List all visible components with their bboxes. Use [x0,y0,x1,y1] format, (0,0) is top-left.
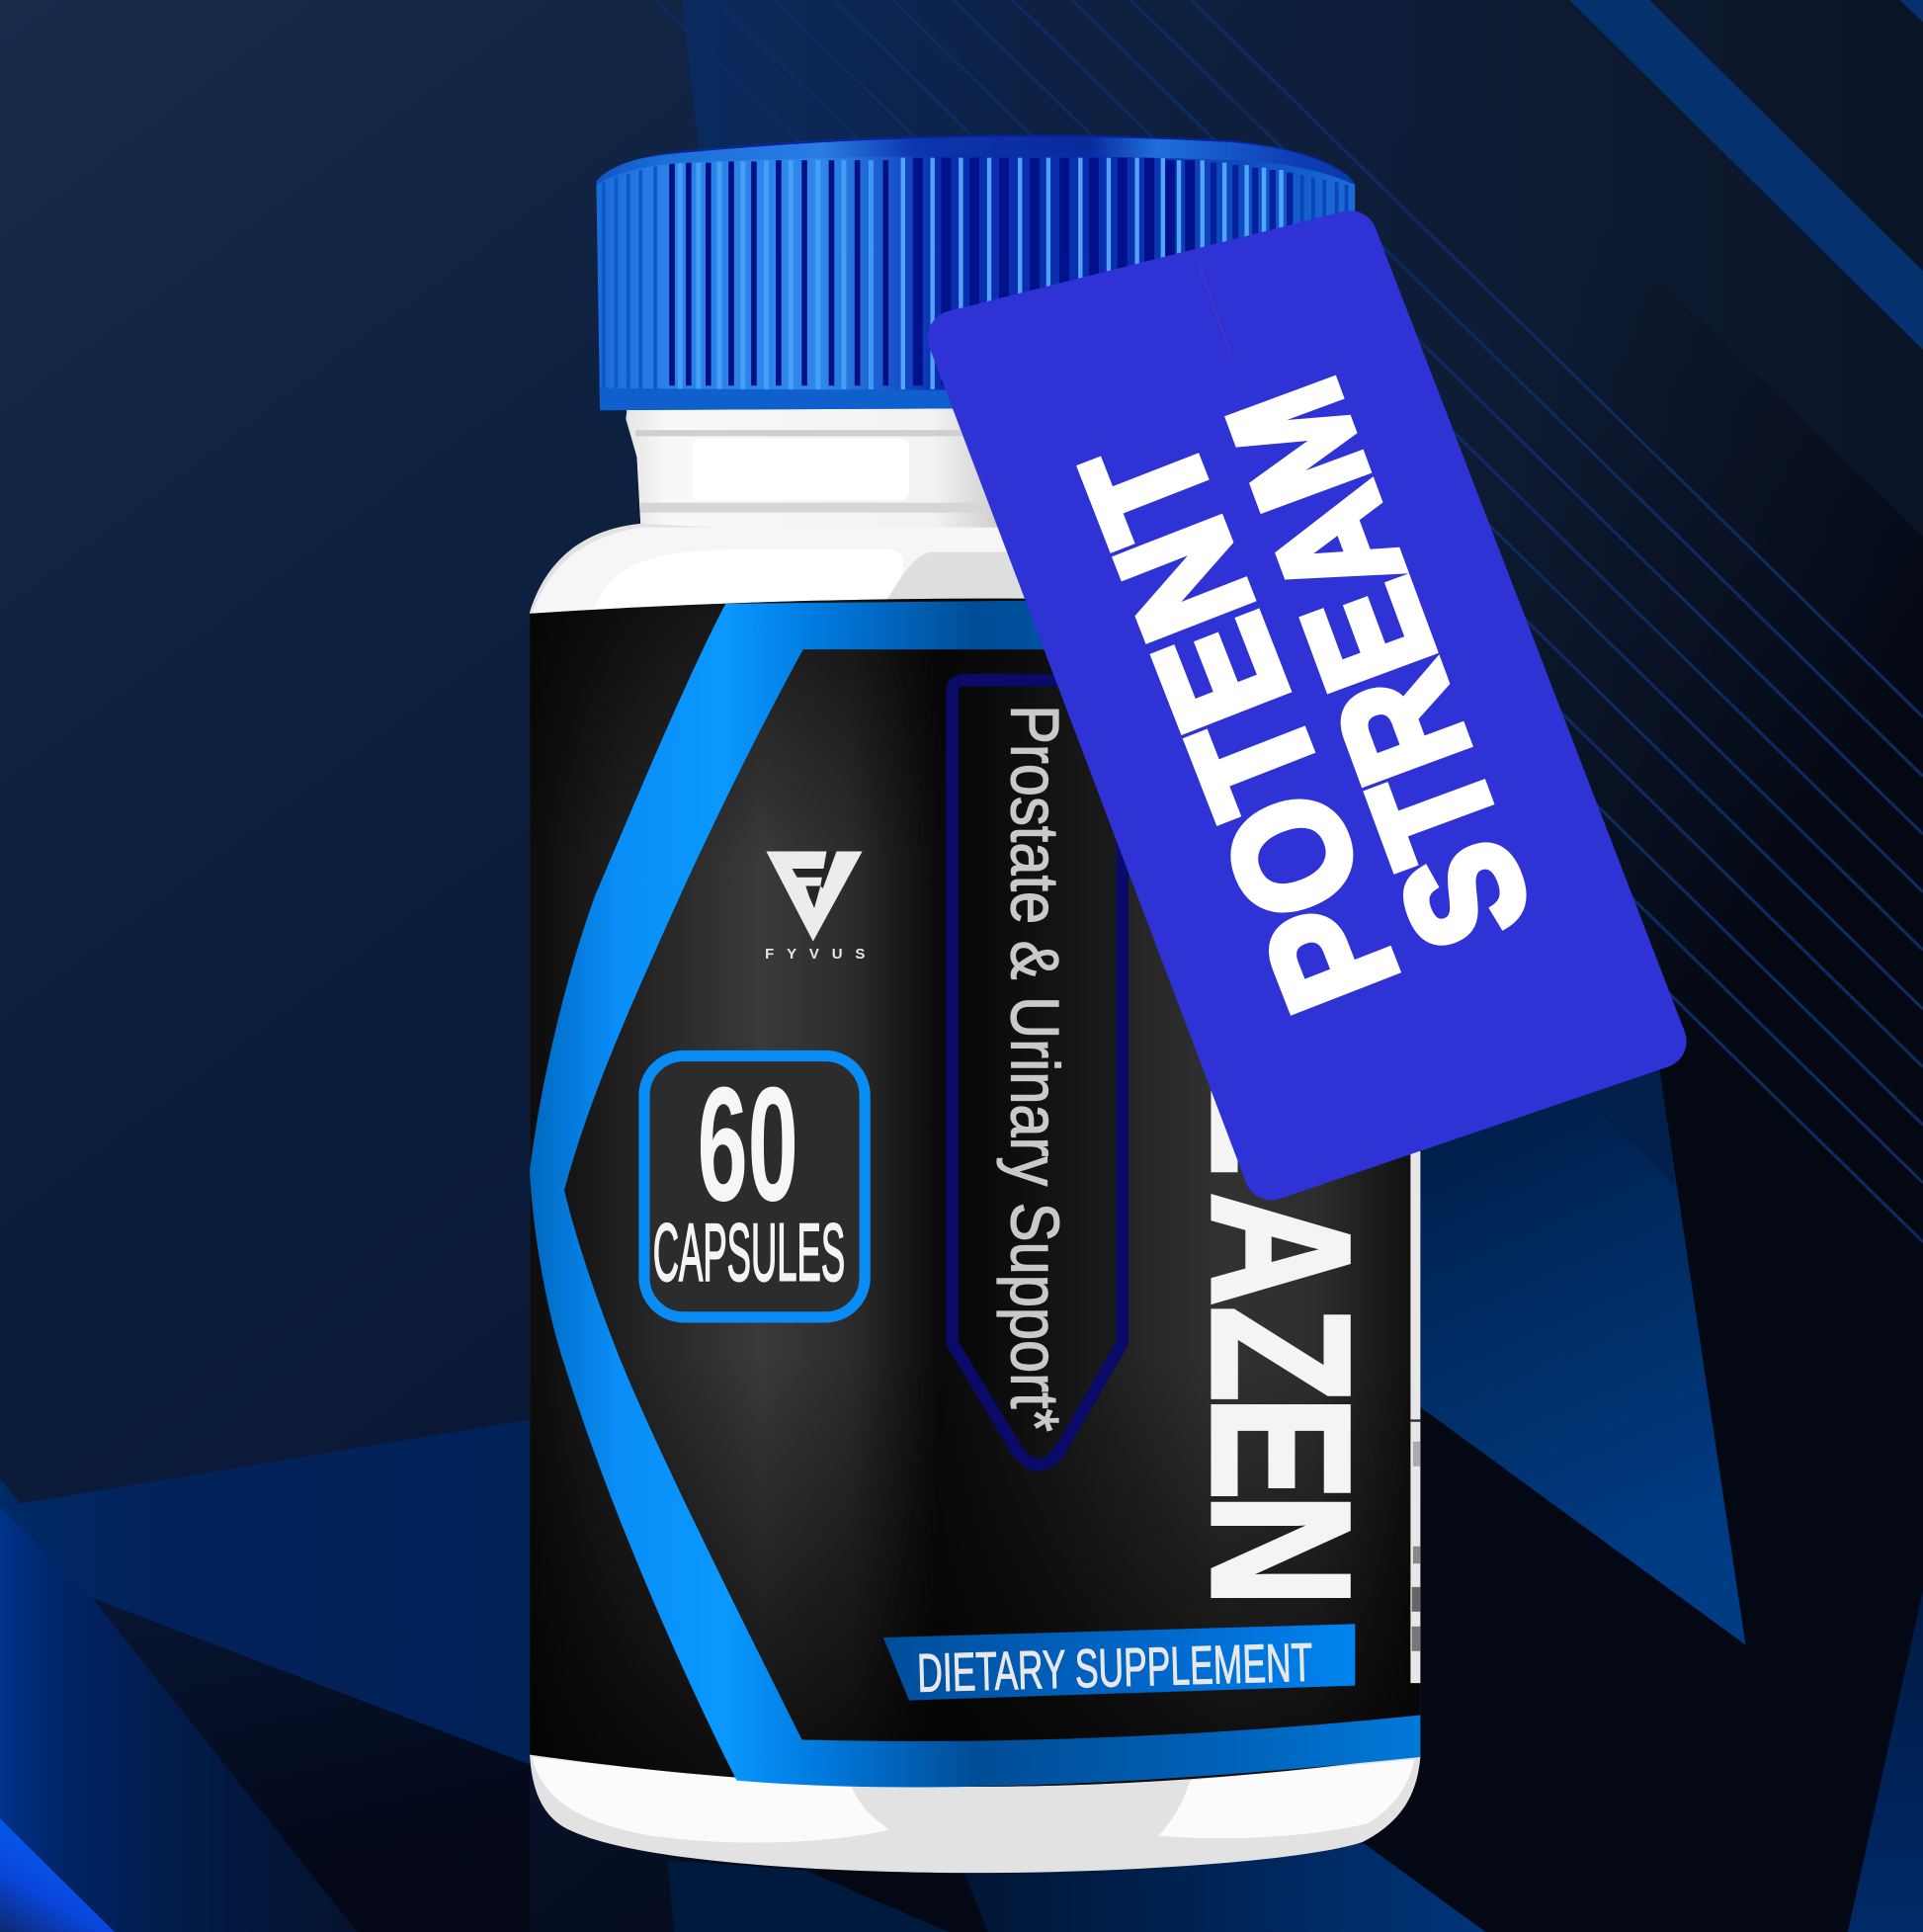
dietary supplement banner [883,1624,1355,1704]
cap ribs left soft [604,166,655,394]
cap top rim [596,135,1355,185]
cap rib dark gaps centre [918,158,1190,385]
tag text line 2: STREAM [1195,360,1565,969]
bottle [530,124,1420,1873]
cap rib edge right [1300,175,1348,222]
dietary supplement banner: DIETARY SUPPLEMENT [916,1632,1313,1704]
pill outline [953,680,1123,1465]
icon: brand logo [766,852,863,942]
brand name: FYVUS [765,946,878,963]
cap rib dark gaps right [1210,162,1293,245]
tag: potent stream [955,238,1659,1173]
cap rim dark outline [616,135,1345,173]
product name: LAZEN [1171,1079,1389,1607]
capsule count badge: 60 [698,1052,798,1234]
neck shading [531,400,1084,616]
capsule count badge [644,1052,865,1317]
bottle body and neck [530,400,1420,1873]
cap bottom ring [595,388,1355,419]
bottom highlights [533,1757,1414,1843]
bottle: CAPSULES [653,1208,845,1298]
white side stripe [1410,1109,1420,1683]
tag text line 1: POTENT [1049,414,1432,1032]
cap rib highlights centre [903,158,1282,389]
cap rib dark gaps left [672,160,885,385]
bottle cap [595,124,1359,419]
cap rib highlights left [680,160,871,389]
label background [530,599,1420,1787]
label shading [530,599,1420,1787]
blue chevron band [530,600,1420,1787]
pill text: Prostate & Urinary Support* [996,705,1072,1432]
